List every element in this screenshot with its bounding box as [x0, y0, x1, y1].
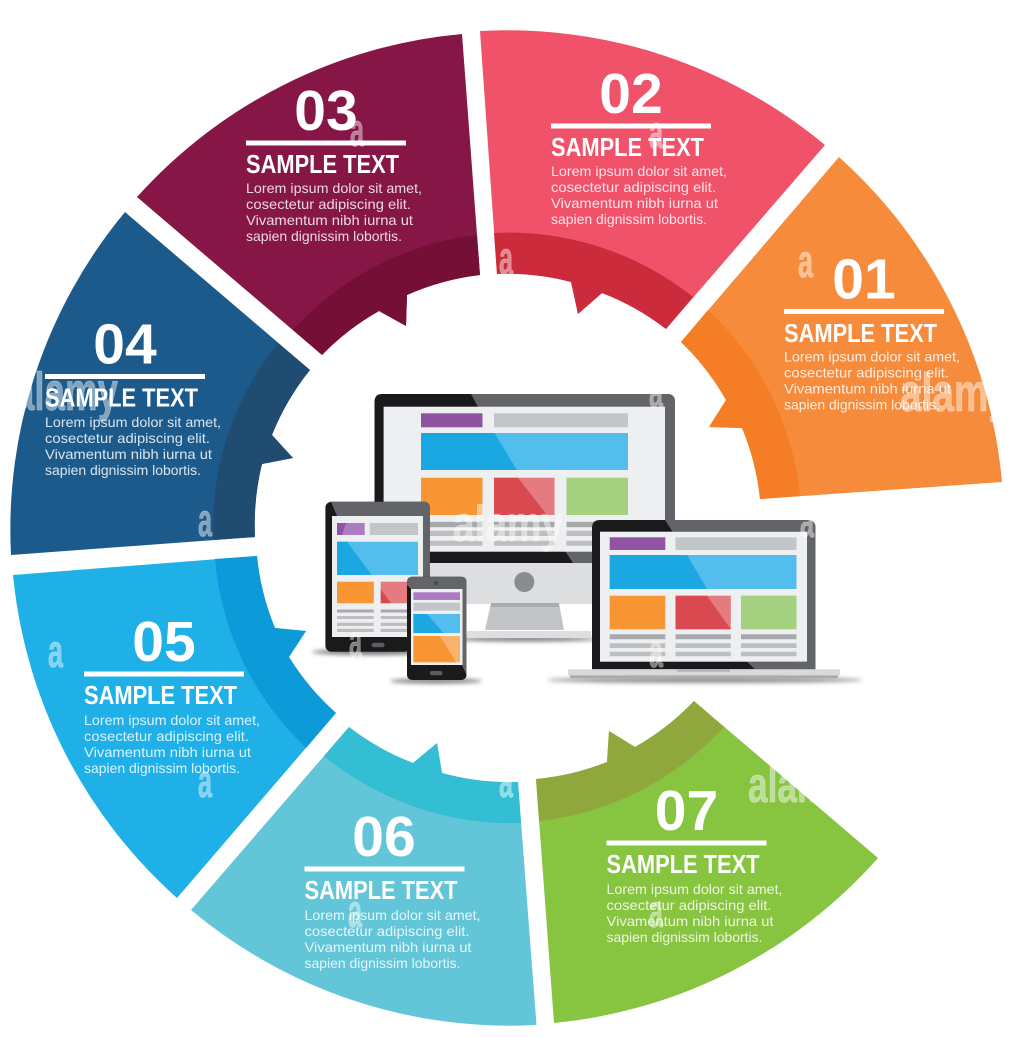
body text 01 [784, 348, 960, 412]
body text 05: Lorem ipsum dolor sit amet, [84, 712, 260, 728]
body text 05: cosectetur adipiscing elit. [84, 728, 249, 744]
body text 03: Vivamentum nibh iurna ut [246, 212, 413, 228]
body text 01: Lorem ipsum dolor sit amet, [784, 348, 960, 364]
stock photo watermarks: alamy [748, 757, 848, 813]
body text 02: Vivamentum nibh iurna ut [551, 195, 718, 211]
stock photo watermarks: a [350, 104, 364, 156]
stock photo watermarks: a [649, 625, 663, 677]
body text 03: sapien dignissim lobortis. [246, 228, 402, 244]
rule 01 [784, 309, 944, 314]
stock photo watermarks: alamy [14, 362, 118, 422]
body text 06: Vivamentum nibh iurna ut [304, 939, 472, 955]
panel: segment 01 orange [681, 157, 1002, 499]
rule 07 [606, 840, 766, 846]
heading 05: SAMPLE TEXT [84, 682, 237, 710]
icon: laptop [547, 520, 863, 683]
inner band with arrow 06 [324, 727, 521, 823]
segment shape 06 [191, 727, 536, 1026]
body text 03: Lorem ipsum dolor sit amet, [246, 180, 422, 196]
body text 03 [246, 180, 422, 244]
rule 06 [304, 866, 464, 872]
panel: segment 07 green [536, 701, 878, 1023]
rule 02 [551, 124, 711, 128]
heading 07: SAMPLE TEXT [606, 851, 760, 879]
inner band with arrow 02 [494, 233, 693, 329]
inner band with arrow 05 [215, 556, 336, 748]
number 02: 02 [599, 62, 663, 126]
body text 04: cosectetur adipiscing elit. [45, 430, 210, 446]
stock photo watermarks: a [649, 106, 663, 158]
heading 06: SAMPLE TEXT [304, 877, 458, 905]
body text 03: cosectetur adipiscing elit. [246, 196, 411, 212]
segment shape 04 [10, 212, 310, 555]
body text 07: Lorem ipsum dolor sit amet, [606, 881, 782, 897]
panel: segment 03 purple [137, 34, 480, 355]
heading 04: SAMPLE TEXT [45, 384, 198, 412]
number 06: 06 [352, 805, 416, 869]
stock photo watermarks: a [348, 885, 362, 937]
body text 06: sapien dignissim lobortis. [304, 955, 460, 971]
stock photo watermarks: a [649, 885, 663, 937]
body text 05: Vivamentum nibh iurna ut [84, 744, 251, 760]
icon: desktop monitor [374, 394, 675, 642]
body text 04: Lorem ipsum dolor sit amet, [45, 414, 221, 430]
number 03: 03 [294, 79, 358, 143]
rule 05 [84, 672, 244, 676]
icon: smartphone [390, 577, 482, 684]
stock photo watermarks: a [198, 755, 212, 807]
body text 05 [84, 712, 260, 776]
stock photo watermarks: a [198, 494, 212, 546]
number 01: 01 [832, 248, 896, 312]
body text 07: Vivamentum nibh iurna ut [606, 913, 774, 929]
panel: segment 06 teal [191, 727, 536, 1026]
body text 02: sapien dignissim lobortis. [551, 211, 707, 227]
segment shape 07 [536, 701, 878, 1023]
body text 06: cosectetur adipiscing elit. [304, 923, 470, 939]
segment shape 01 [681, 157, 1002, 499]
stock photo watermarks: a [499, 232, 513, 284]
body text 01: sapien dignissim lobortis. [784, 396, 940, 412]
inner band with arrow 07 [536, 701, 724, 821]
heading 02: SAMPLE TEXT [551, 134, 704, 162]
body text 05: sapien dignissim lobortis. [84, 760, 240, 776]
body text 06: Lorem ipsum dolor sit amet, [304, 907, 480, 923]
rule 03 [246, 140, 406, 146]
segment shape 05 [13, 556, 336, 898]
stock photo watermarks: a [499, 755, 513, 807]
segment shape 02 [480, 30, 825, 329]
stock photo watermarks: a [798, 235, 813, 287]
stock photo watermarks [14, 104, 1010, 937]
body text 04 [45, 414, 221, 478]
number 04: 04 [93, 312, 157, 376]
panel: segment 05 light blue [13, 556, 336, 898]
number 07: 07 [655, 779, 718, 843]
body text 07: cosectetur adipiscing elit. [606, 897, 772, 913]
body text 02: cosectetur adipiscing elit. [551, 179, 716, 195]
segment shape 03 [137, 34, 480, 355]
heading 01: SAMPLE TEXT [784, 320, 937, 348]
stock photo watermarks: a [649, 365, 663, 417]
rule 04 [45, 374, 205, 379]
stock photo watermarks: a [48, 625, 63, 677]
body text 02 [551, 163, 727, 227]
stock photo watermarks: alamy [453, 496, 563, 552]
body text 01: Vivamentum nibh iurna ut [784, 380, 951, 396]
heading 03: SAMPLE TEXT [246, 151, 399, 179]
body text 04: Vivamentum nibh iurna ut [45, 446, 212, 462]
body text 01: cosectetur adipiscing elit. [784, 364, 949, 380]
stock photo watermarks: a [800, 495, 814, 547]
stock photo watermarks: a [349, 615, 362, 667]
inner band with arrow 03 [293, 235, 480, 355]
panel: segment 04 dark blue [10, 212, 310, 555]
body text 07 [606, 881, 782, 945]
body text 04: sapien dignissim lobortis. [45, 462, 201, 478]
inner band with arrow 04 [213, 343, 310, 540]
inner band with arrow 01 [681, 310, 800, 499]
icon: tablet [312, 502, 432, 655]
body text 07: sapien dignissim lobortis. [606, 929, 762, 945]
body text 06 [304, 907, 480, 971]
panel: segment 02 red [480, 30, 825, 329]
number 05: 05 [132, 610, 196, 674]
body text 02: Lorem ipsum dolor sit amet, [551, 163, 727, 179]
